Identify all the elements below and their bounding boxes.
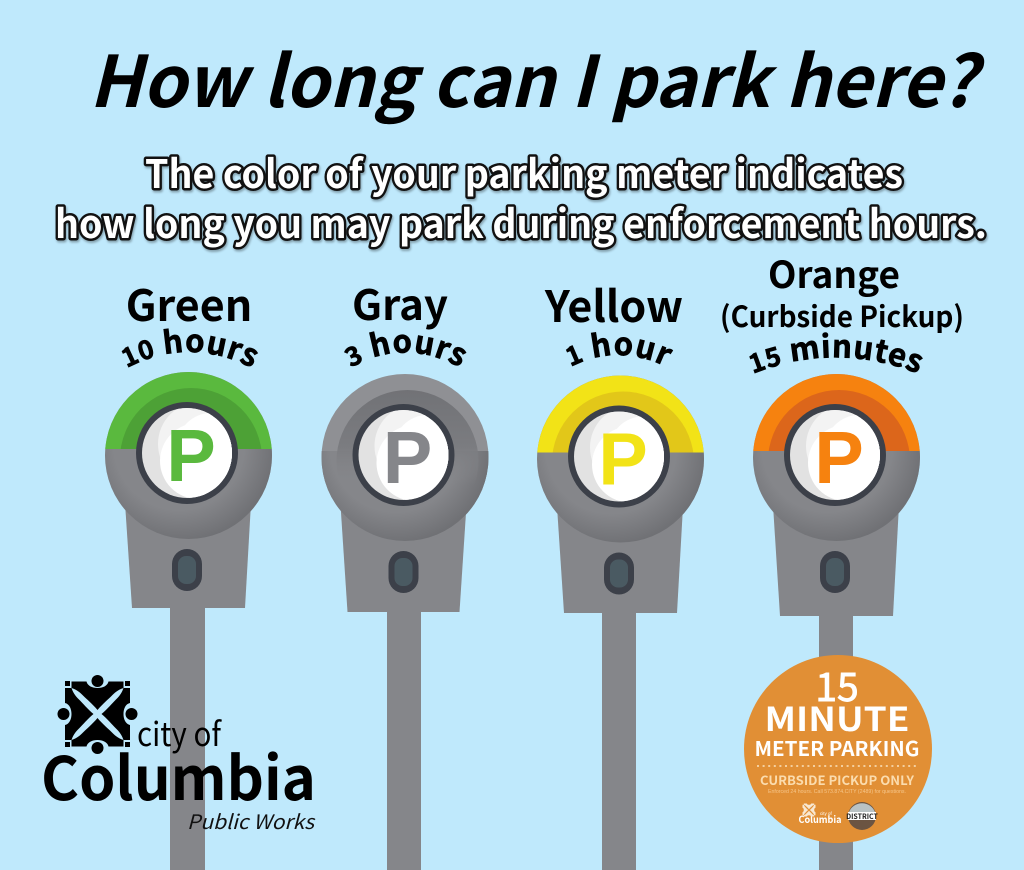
subtitle: The color of your parking meter indicates <box>145 144 903 200</box>
icon: city of Columbia emblem <box>58 675 138 754</box>
label: yellow: 1 hour <box>566 332 674 366</box>
badge: 15 minute meter parking: city of <box>820 811 833 816</box>
badge: 15 minute meter parking: Enforced 24 hours. Call 573.874.CITY (2489) for questions. <box>768 789 906 795</box>
meter: gray <box>322 374 488 870</box>
badge: 15 minute meter parking: 15 <box>815 657 859 713</box>
label: yellow: Yellow <box>544 273 683 335</box>
meter: orange: P <box>814 416 864 499</box>
badge: 15 minute meter parking: METER PARKING <box>754 733 920 762</box>
meter: yellow <box>537 376 704 870</box>
logo: City of Columbia Public Works <box>41 675 316 835</box>
pole <box>170 605 205 870</box>
meter: gray: P <box>383 416 432 499</box>
meter: green: P <box>166 414 216 497</box>
text: Columbia: Columbia <box>41 731 316 818</box>
title: How long can I park here? <box>89 26 986 128</box>
label: orange <box>720 245 964 374</box>
meter: yellow: P <box>598 418 648 500</box>
badge: 15 minute meter parking <box>744 655 932 843</box>
label: yellow <box>544 273 683 366</box>
label: gray <box>344 272 466 366</box>
pole <box>602 609 636 870</box>
badge: 15 minute meter parking: MINUTE <box>764 693 910 741</box>
meter: green <box>105 372 272 870</box>
badge: 15 minute meter parking: CURBSIDE PICKUP ONLY <box>760 770 914 789</box>
pole <box>387 608 421 870</box>
label: green <box>122 272 258 368</box>
label: orange: 15 minutes <box>749 332 923 374</box>
label: gray: Gray <box>352 272 448 333</box>
label: green: 10 hours <box>122 328 258 368</box>
text: city of: city of <box>137 708 222 756</box>
badge: 15 minute meter parking: Columbia <box>798 811 842 826</box>
subtitle: how long you may park during enforcement hours. <box>55 194 987 250</box>
label: orange: Orange <box>768 245 900 299</box>
label: orange: (Curbside Pickup) <box>720 294 964 336</box>
label: gray: 3 hours <box>344 331 466 366</box>
meter: orange <box>753 374 920 870</box>
subtitle <box>55 144 987 250</box>
text: Public Works: Public Works <box>187 806 316 835</box>
badge: 15 minute meter parking: DISTRICT <box>846 812 879 822</box>
label: green: Green <box>126 272 252 334</box>
pole <box>819 612 853 870</box>
